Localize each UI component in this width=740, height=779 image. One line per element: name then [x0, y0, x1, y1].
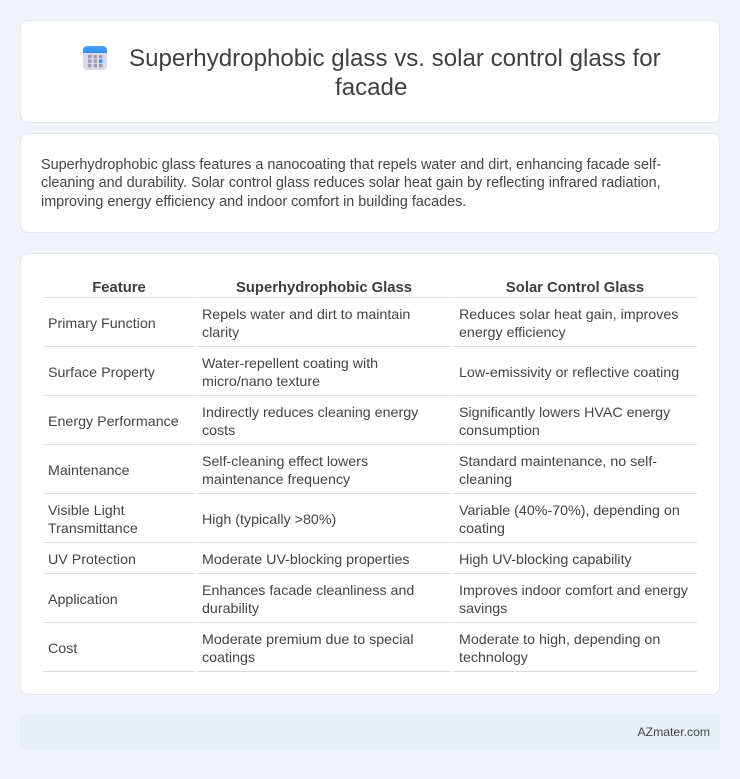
row: cost	[48, 632, 660, 666]
row: cost: coatings	[202, 650, 255, 666]
row: uv protection: Moderate UV-blocking properties	[202, 552, 410, 568]
row: visible light transmittance	[48, 503, 680, 537]
panel: introduction	[20, 133, 720, 233]
row: energy performance: Significantly lowers HVAC energy	[459, 405, 670, 421]
title: Superhydrophobic glass vs. solar control glass for	[129, 45, 661, 72]
text block: introduction: improving energy efficiency and indoor comfort in building facades.	[41, 194, 466, 210]
row: application: Application	[48, 592, 118, 608]
row: surface property: Surface Property	[48, 365, 155, 381]
row: cost: technology	[459, 650, 528, 666]
row: energy performance: consumption	[459, 423, 540, 439]
row: visible light transmittance: Transmittance	[48, 521, 138, 537]
row: energy performance: costs	[202, 423, 235, 439]
footer bar	[20, 715, 720, 749]
row: surface property: Low-emissivity or reflective coating	[459, 365, 679, 381]
row: primary function: Primary Function	[48, 316, 156, 332]
row: application: Improves indoor comfort and energy	[459, 583, 688, 599]
footer text: AZmater.com	[638, 725, 710, 739]
row: application: savings	[459, 601, 507, 617]
row: visible light transmittance: Visible Light	[48, 503, 125, 519]
row: surface property	[48, 356, 679, 390]
row: surface property: micro/nano texture	[202, 374, 320, 390]
table header: Superhydrophobic Glass	[236, 280, 412, 296]
row: energy performance: Indirectly reduces cleaning energy	[202, 405, 418, 421]
row: application	[48, 583, 688, 617]
row: visible light transmittance: High (typically >80%)	[202, 512, 336, 528]
row: cost: Cost	[48, 641, 77, 657]
row: visible light transmittance: Variable (40%-70%), depending on	[459, 503, 680, 519]
row: primary function	[48, 307, 678, 341]
title: facade	[335, 74, 407, 101]
table header: Feature	[92, 280, 146, 296]
row: maintenance: cleaning	[459, 472, 512, 488]
row: cost: Moderate to high, depending on	[459, 632, 660, 648]
row: energy performance	[48, 405, 670, 439]
row: surface property: Water-repellent coating with	[202, 356, 378, 372]
table header	[92, 280, 644, 296]
row: energy performance: Energy Performance	[48, 414, 179, 430]
icon: calendar	[83, 46, 107, 70]
row: maintenance: Maintenance	[48, 463, 130, 479]
row: maintenance: Self-cleaning effect lowers	[202, 454, 368, 470]
panel: comparison table	[20, 253, 720, 695]
text block: introduction: cleaning and durability. Solar control glass reduces solar heat gain by reflecting infrared radiation,	[41, 175, 661, 191]
panel: title card	[20, 20, 720, 123]
row: uv protection	[48, 552, 632, 568]
row: maintenance: maintenance frequency	[202, 472, 350, 488]
row: visible light transmittance: coating	[459, 521, 505, 537]
text block: introduction	[41, 157, 661, 210]
row: uv protection: High UV-blocking capability	[459, 552, 632, 568]
row: maintenance	[48, 454, 657, 488]
text block: introduction: Superhydrophobic glass features a nanocoating that repels water and dirt, enhancing facade self-	[41, 157, 661, 173]
row: primary function: Repels water and dirt to maintain	[202, 307, 410, 323]
title	[129, 45, 661, 101]
row: primary function: Reduces solar heat gain, improves	[459, 307, 678, 323]
row: application: durability	[202, 601, 259, 617]
table header: Solar Control Glass	[506, 280, 644, 296]
row: maintenance: Standard maintenance, no self-	[459, 454, 657, 470]
row: primary function: energy efficiency	[459, 325, 566, 341]
row: cost: Moderate premium due to special	[202, 632, 413, 648]
row: application: Enhances facade cleanliness and	[202, 583, 414, 599]
row: primary function: clarity	[202, 325, 239, 341]
row: uv protection: UV Protection	[48, 552, 136, 568]
